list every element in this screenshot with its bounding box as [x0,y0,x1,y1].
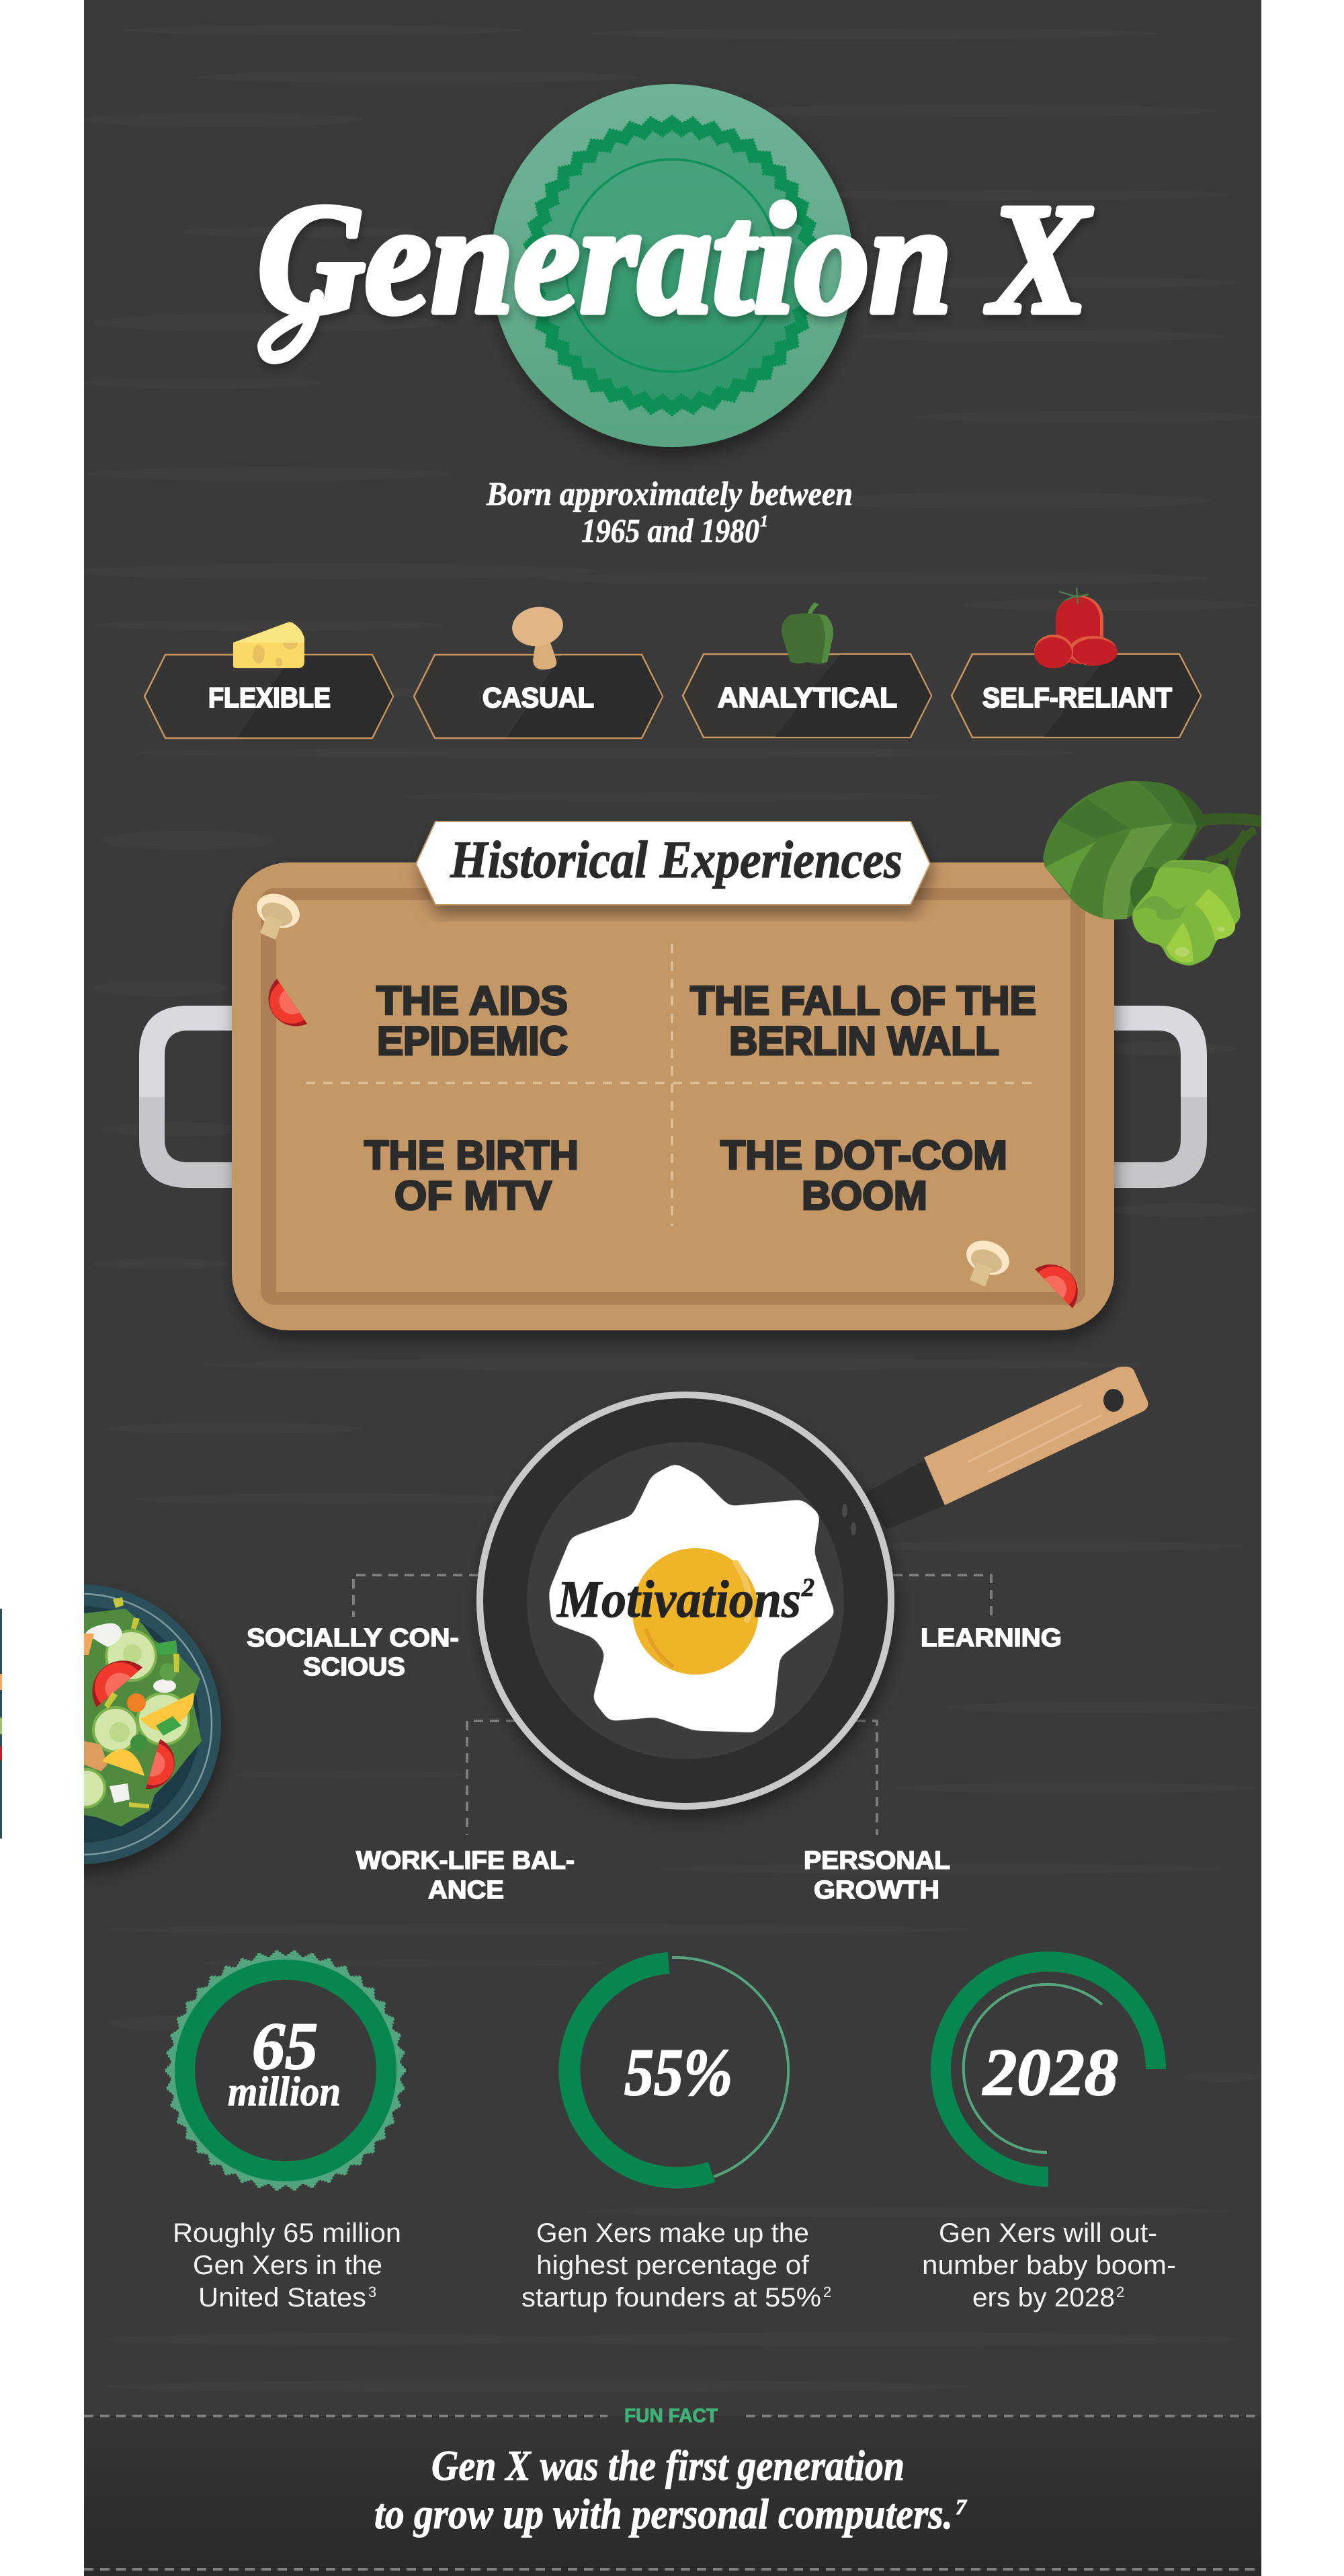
caption: highest percentage of [536,2251,810,2280]
caption: Gen Xers will out- [939,2218,1157,2248]
stat: 65 million [167,1951,405,2312]
caption: Gen Xers in the [193,2251,382,2280]
caption: United States [198,2283,366,2312]
icon: tomatoes [1034,588,1118,668]
event: fall of the berlin wall: BERLIN WALL [729,1018,999,1063]
section heading: motivations: 2 [801,1574,814,1602]
icon: tomato slice [1034,1260,1081,1314]
board handles [139,1006,1207,1188]
stat: 65 million: million [228,2069,341,2115]
heading ribbon: Historical Experiences [450,830,902,889]
title: Generation X [257,171,1092,346]
trait: casual: CASUAL [482,682,594,713]
icon: lettuce leaves [1043,781,1263,967]
trait: analytical [683,602,931,737]
caption [922,2218,1176,2312]
panel: historical experiences cutting board [139,821,1207,1330]
icon: cheese [233,622,304,668]
event: aids epidemic [376,978,568,1063]
trait: self-reliant: SELF-RELIANT [982,682,1172,713]
label: work-life balance: ANCE [428,1876,504,1904]
trait: self-reliant [952,588,1201,737]
subtitle: Born approximately between [486,475,853,512]
caption: ers by 2028 [972,2283,1115,2312]
event: dot-com boom: BOOM [802,1173,927,1218]
event: fall of the berlin wall: THE FALL OF THE [690,978,1036,1023]
progress ring [941,1962,1156,2177]
icon: salad plate [84,1584,226,1876]
stat: 2028 [922,1962,1176,2312]
label: work-life balance: WORK-LIFE BAL- [356,1847,575,1875]
fun fact statement: Gen X was the first generation [431,2442,905,2489]
subtitle: 1965 and 1980 [581,512,759,549]
stat: 55% [521,1958,831,2312]
badge [167,1951,405,2190]
caption: 3 [368,2284,376,2300]
caption [173,2218,401,2312]
caption: number baby boom- [922,2251,1176,2280]
green seal badge [491,84,853,447]
caption: startup founders at 55% [521,2283,821,2312]
stat: 65 million: 65 [252,2009,318,2083]
trait: casual [414,604,663,738]
event: fall of the berlin wall [690,978,1036,1063]
event: dot-com boom [720,1133,1007,1218]
section heading: motivations: Motivations [556,1570,801,1628]
event: birth of mtv [364,1133,579,1218]
label: personal growth [804,1847,950,1904]
icon: green pepper [782,602,833,663]
plate edge sliver [0,1609,2,1839]
fun fact background band [84,2416,1261,2576]
event: aids epidemic: THE AIDS [376,978,568,1023]
trait: analytical: ANALYTICAL [718,682,897,713]
icon: mushroom [961,1234,1015,1287]
board surface [232,862,1114,1330]
label: work-life balance [356,1847,575,1904]
fun fact statement: to grow up with personal computers. [374,2490,953,2538]
icon: fried egg [549,1463,835,1732]
label: personal growth: PERSONAL [804,1847,950,1875]
label: socially conscious [247,1624,459,1681]
caption: Gen Xers make up the [536,2218,809,2248]
fun fact: FUN FACT [624,2405,718,2427]
fun fact statement [374,2442,968,2538]
caption: 2 [1116,2284,1124,2300]
subtitle [486,475,853,549]
subtitle: 1 [760,513,768,530]
event: birth of mtv: OF MTV [394,1173,552,1218]
dashed connectors [353,1575,991,1835]
icon: mushroom [509,604,566,670]
icon: frying pan [480,1367,1148,1806]
label: learning: LEARNING [921,1624,1062,1652]
stat: 2028: 2028 [982,2035,1118,2109]
event: birth of mtv: THE BIRTH [364,1133,579,1178]
progress ring [570,1958,788,2178]
icon: mushroom [251,887,305,940]
trait: flexible: FLEXIBLE [208,682,331,713]
heading ribbon [416,821,930,905]
pan handle [924,1367,1148,1505]
caption: 2 [823,2284,831,2300]
event: dot-com boom: THE DOT-COM [720,1133,1007,1178]
label: socially conscious: SOCIALLY CON- [247,1624,459,1652]
event: aids epidemic: EPIDEMIC [377,1018,568,1063]
label: personal growth: GROWTH [814,1876,939,1904]
stat: 55%: 55% [624,2035,732,2109]
fun fact [374,2405,968,2538]
pan neck [862,1460,945,1529]
trait: flexible [144,622,393,738]
fun fact statement: 7 [956,2495,968,2519]
caption [521,2218,831,2312]
caption: Roughly 65 million [173,2218,401,2248]
label: socially conscious: SCIOUS [303,1653,405,1681]
icon: tomato slice [269,979,307,1026]
